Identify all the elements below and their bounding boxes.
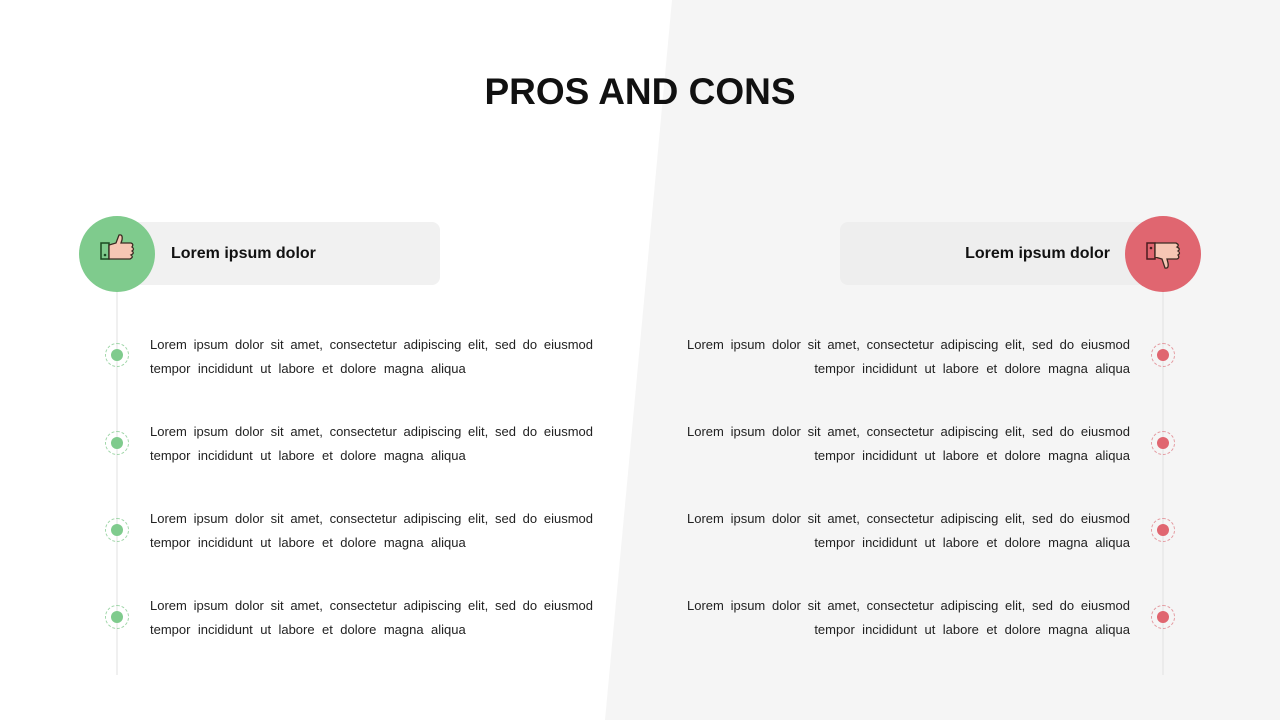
list cons: tempor incididunt ut labore et dolore magna aliqua <box>814 361 1130 376</box>
item 3 <box>687 511 1175 550</box>
item 2 <box>105 424 593 463</box>
header box pros <box>130 222 440 285</box>
item 1 <box>105 337 593 376</box>
header box cons <box>840 222 1150 285</box>
list cons <box>687 337 1175 637</box>
timeline line pros <box>116 290 118 675</box>
list cons: Lorem ipsum dolor sit amet, consectetur adipiscing elit, sed do eiusmod <box>687 598 1130 613</box>
list cons: Lorem ipsum dolor sit amet, consectetur adipiscing elit, sed do eiusmod <box>687 337 1130 352</box>
list pros: Lorem ipsum dolor sit amet, consectetur adipiscing elit, sed do eiusmod <box>150 598 593 613</box>
item 3 <box>105 511 593 550</box>
list pros: Lorem ipsum dolor sit amet, consectetur adipiscing elit, sed do eiusmod <box>150 511 593 526</box>
list cons: Lorem ipsum dolor sit amet, consectetur adipiscing elit, sed do eiusmod <box>687 511 1130 526</box>
list cons: tempor incididunt ut labore et dolore magna aliqua <box>814 622 1130 637</box>
list pros: tempor incididunt ut labore et dolore magna aliqua <box>150 448 466 463</box>
list pros <box>105 337 593 637</box>
list cons: tempor incididunt ut labore et dolore magna aliqua <box>814 535 1130 550</box>
list pros: Lorem ipsum dolor sit amet, consectetur adipiscing elit, sed do eiusmod <box>150 337 593 352</box>
list pros: Lorem ipsum dolor sit amet, consectetur adipiscing elit, sed do eiusmod <box>150 424 593 439</box>
list cons: tempor incididunt ut labore et dolore magna aliqua <box>814 448 1130 463</box>
list cons: Lorem ipsum dolor sit amet, consectetur adipiscing elit, sed do eiusmod <box>687 424 1130 439</box>
item 2 <box>687 424 1175 463</box>
list pros: tempor incididunt ut labore et dolore magna aliqua <box>150 361 466 376</box>
panel: cons <box>965 216 1201 675</box>
icon: thumbs up <box>79 216 155 292</box>
item 4 <box>105 598 593 637</box>
list pros: tempor incididunt ut labore et dolore magna aliqua <box>150 622 466 637</box>
icon: thumbs down <box>1125 216 1201 292</box>
timeline line cons <box>1162 290 1164 675</box>
header box pros: Lorem ipsum dolor <box>171 245 316 262</box>
panel: pros <box>79 216 440 675</box>
title: PROS AND CONS <box>484 71 796 112</box>
header box cons: Lorem ipsum dolor <box>965 245 1110 262</box>
item 1 <box>687 337 1175 376</box>
item 4 <box>687 598 1175 637</box>
list pros: tempor incididunt ut labore et dolore magna aliqua <box>150 535 466 550</box>
